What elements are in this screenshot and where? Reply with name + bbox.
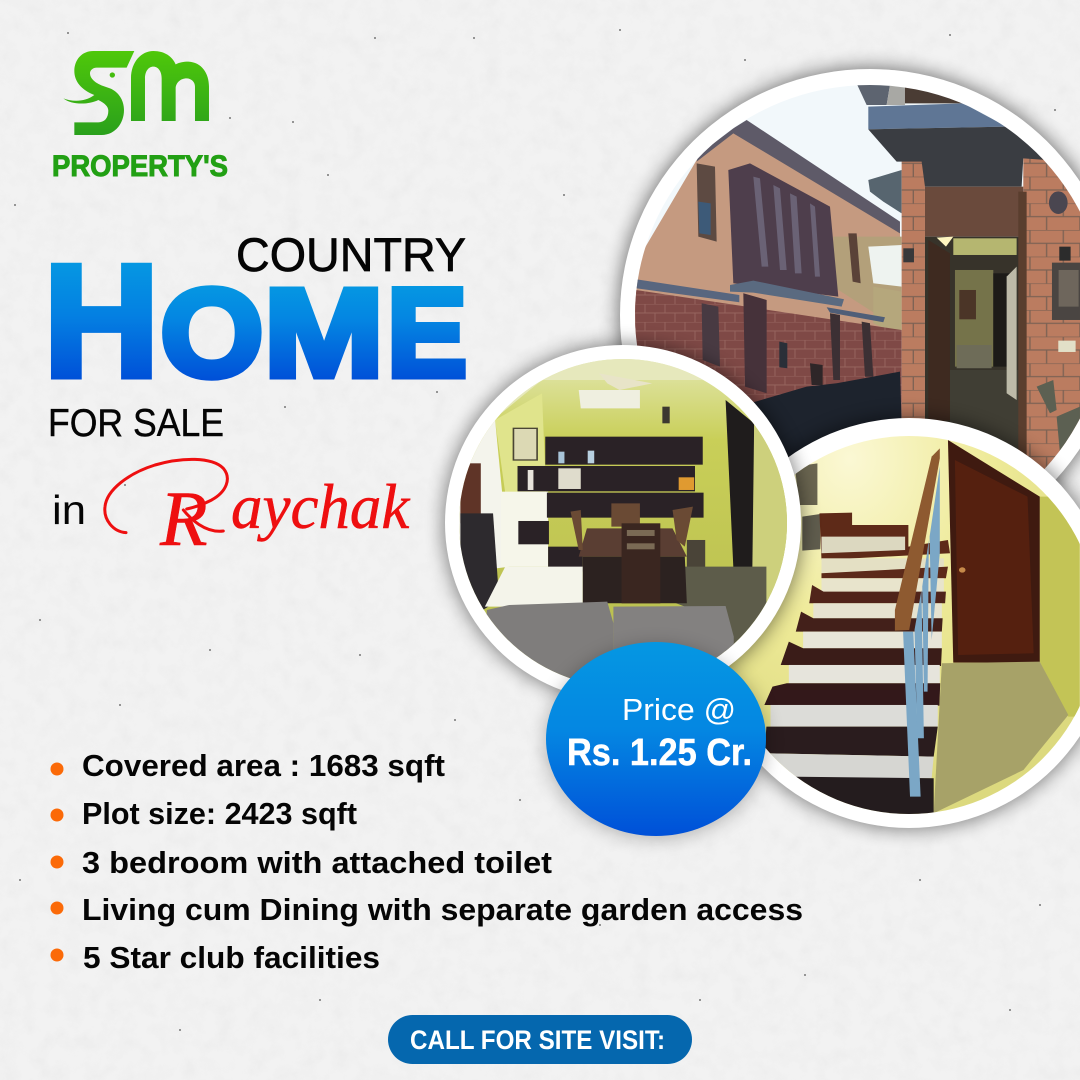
heading: HOME: E — [387, 263, 467, 403]
bullet: covered area: Covered area : 1683 sqft — [82, 748, 445, 783]
feature list — [50, 748, 803, 975]
heading: HOME: M — [264, 263, 384, 403]
heading: Raychak script: aychak — [231, 472, 410, 542]
heading: Raychak script — [105, 459, 410, 562]
heading: HOME — [44, 234, 467, 410]
price label: Price @ — [622, 692, 736, 727]
heading: HOME: O — [160, 263, 263, 403]
photo: house exterior — [605, 54, 1080, 490]
heading: FOR SALE: FOR SALE — [48, 402, 224, 445]
photo: stairs and door — [702, 416, 1080, 840]
bullet: club facilities: 5 Star club facilities — [83, 940, 380, 975]
price value: Rs. 1.25 Cr. — [567, 732, 752, 774]
bullet: bedrooms: 3 bedroom with attached toilet — [82, 845, 552, 880]
logo: SM Property's — [52, 51, 228, 183]
bullet: plot size: Plot size: 2423 sqft — [82, 796, 357, 831]
heading: in: in — [52, 487, 86, 533]
photo: living and dining room — [440, 340, 803, 703]
heading: Country Home for Sale in Raychak — [44, 228, 467, 562]
icon: elephant S mark — [63, 51, 209, 135]
call to action button — [388, 1015, 692, 1064]
call to action button: CALL FOR SITE VISIT: — [410, 1025, 665, 1055]
bullet: living and dining: Living cum Dining with separate garden access — [82, 892, 803, 927]
price badge — [545, 642, 767, 839]
heading: COUNTRY: COUNTRY — [236, 228, 466, 281]
heading: Raychak script: R — [159, 475, 208, 562]
heading: HOME: H — [44, 234, 159, 410]
logo wordmark: PROPERTY'S — [52, 150, 228, 183]
